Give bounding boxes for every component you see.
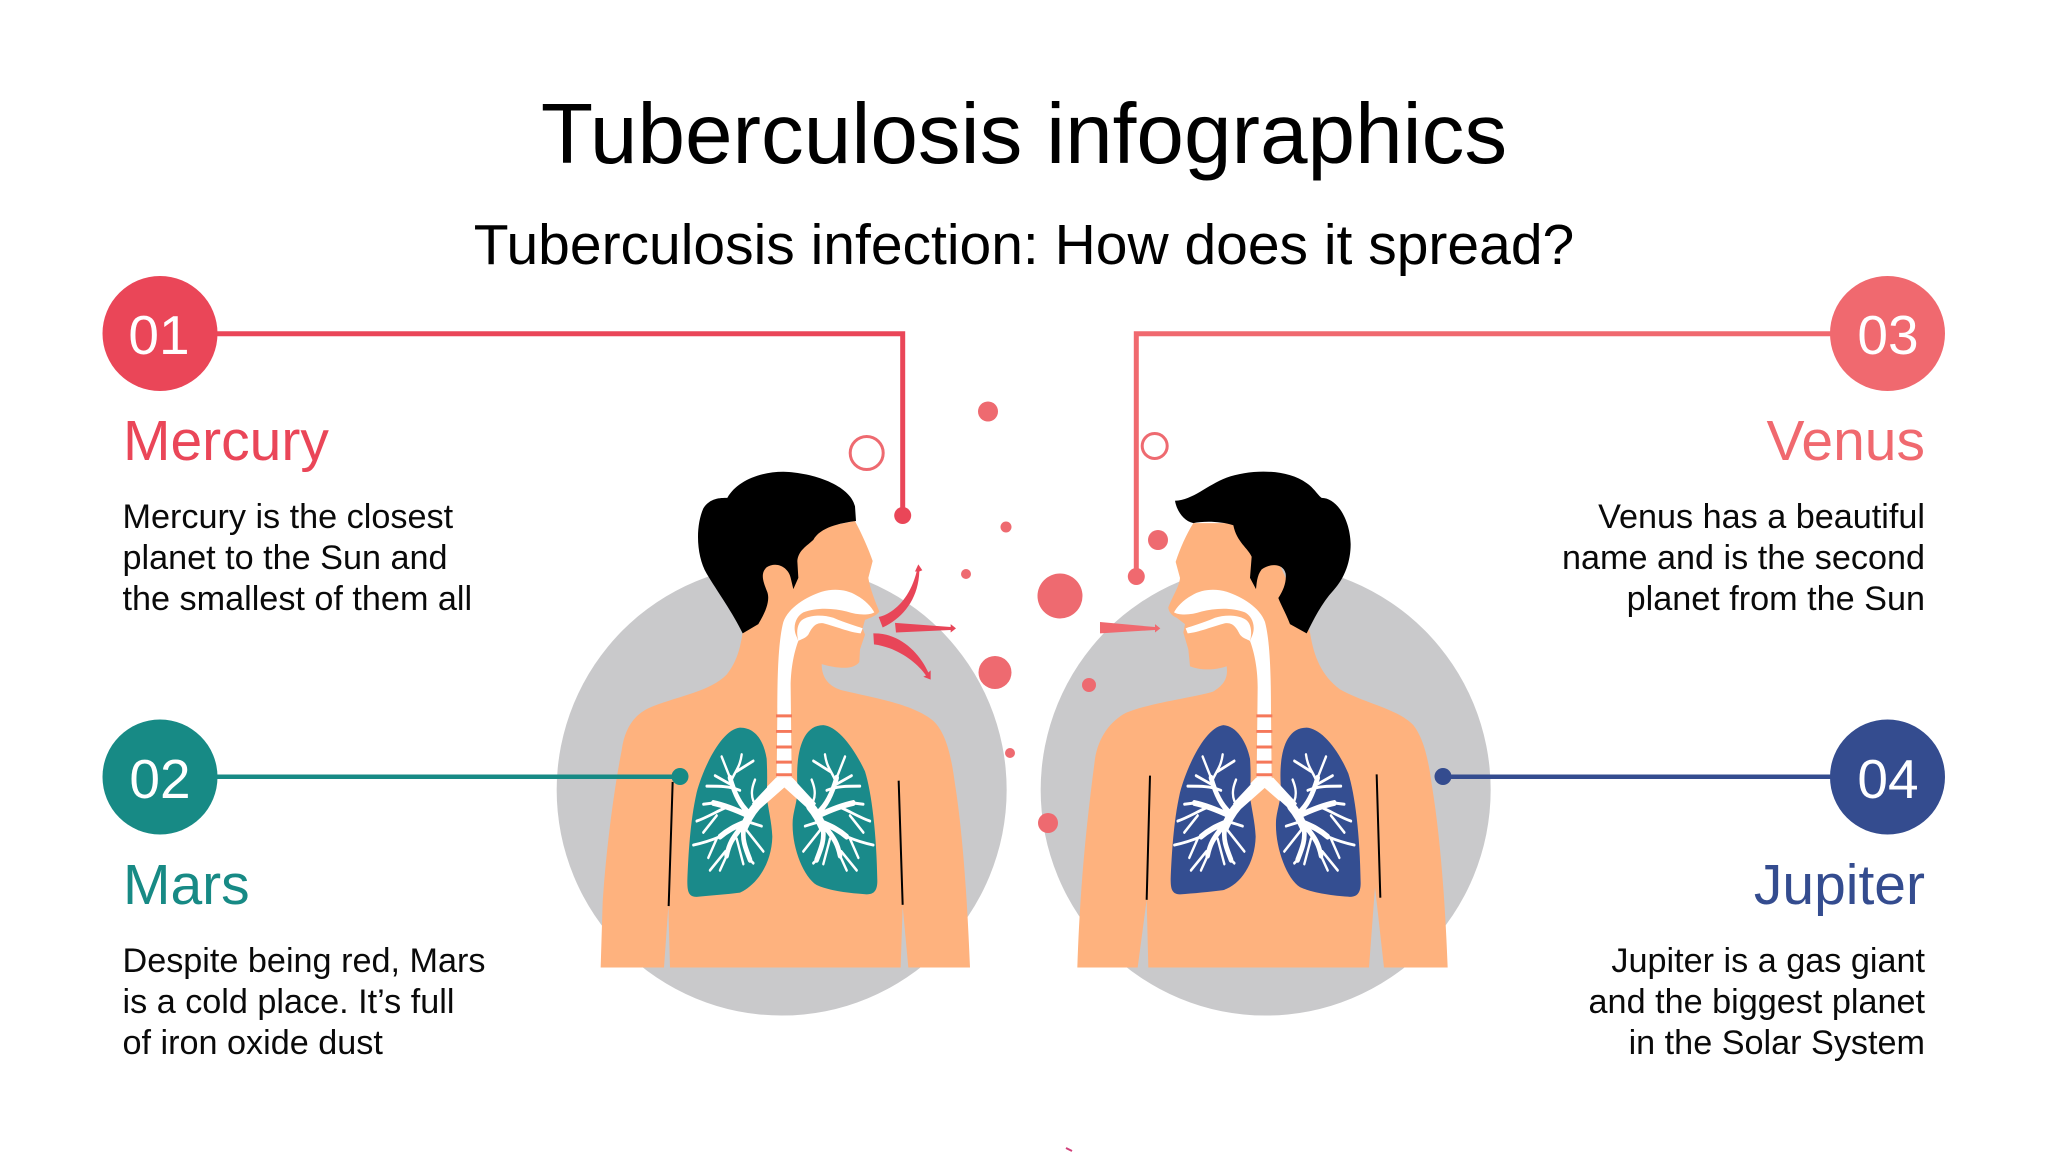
- number badge 03: [1830, 276, 1945, 391]
- connector 02: [210, 774, 680, 779]
- grey background circle: [557, 564, 1007, 1016]
- number 03: 03: [1857, 304, 1919, 366]
- number 02: 02: [129, 748, 191, 810]
- body Mars: Despite being red, Mars: [122, 942, 485, 980]
- hair: [698, 472, 856, 633]
- arrow: exhale up: [879, 564, 922, 627]
- panel: 03 Venus: [1128, 276, 1945, 618]
- bronchi: [752, 778, 816, 812]
- panel: 02 Mars: [102, 720, 688, 1062]
- body Venus: name and is the second: [1562, 539, 1925, 577]
- infectious droplets: [961, 402, 1168, 833]
- number badge 02: [102, 720, 218, 834]
- illustration: left person exhaling: [557, 472, 1007, 1016]
- panel: 01 Mercury: [102, 276, 911, 618]
- bronchial tree right: [1284, 755, 1354, 870]
- body Jupiter: and the biggest planet: [1589, 983, 1925, 1021]
- bronchial tree left: [693, 755, 763, 870]
- arrow: exhale down: [873, 633, 931, 680]
- body Mercury: planet to the Sun and: [122, 539, 448, 577]
- body Venus: Venus has a beautiful: [1598, 498, 1925, 536]
- body and face: [601, 521, 970, 968]
- airway and trachea: [1174, 590, 1300, 814]
- body Mars: of iron oxide dust: [122, 1024, 383, 1062]
- number badge 04: [1830, 720, 1945, 834]
- subtitle: Tuberculosis infection: How does it spread?: [474, 213, 1574, 277]
- panel: 04 Jupiter: [1434, 720, 1945, 1062]
- illustration: right person inhaling: [1041, 472, 1491, 1016]
- number badge 01: [102, 276, 218, 391]
- hair: [1175, 472, 1351, 633]
- arm lines: [669, 781, 903, 906]
- body Venus: planet from the Sun: [1627, 580, 1925, 618]
- connector dot 02: [672, 768, 688, 785]
- airway and trachea: [748, 590, 874, 814]
- body and face: [1077, 523, 1448, 968]
- number 01: 01: [128, 304, 190, 366]
- heading Mars: Mars: [123, 853, 250, 917]
- right lung: [793, 725, 877, 894]
- heading Venus: Venus: [1767, 409, 1925, 473]
- connector dot 04: [1434, 768, 1452, 785]
- body Mars: is a cold place. It’s full: [122, 983, 454, 1021]
- heading Jupiter: Jupiter: [1754, 853, 1925, 917]
- arrow: inhale: [1100, 622, 1160, 633]
- left lung: [687, 728, 772, 897]
- connector 01: [210, 334, 903, 515]
- arm lines: [1147, 774, 1380, 900]
- connector dot 01: [894, 507, 911, 524]
- body Jupiter: Jupiter is a gas giant: [1611, 942, 1925, 980]
- body Jupiter: in the Solar System: [1629, 1024, 1925, 1062]
- title: Tuberculosis infographics: [541, 87, 1507, 182]
- heading Mercury: Mercury: [123, 409, 329, 473]
- left lung: [1171, 725, 1256, 894]
- connector 03: [1136, 334, 1840, 576]
- small mark at bottom: [1066, 1148, 1072, 1151]
- grey background circle: [1041, 564, 1491, 1016]
- bronchial tree left: [1174, 755, 1244, 870]
- connector dot 03: [1128, 568, 1145, 585]
- connector 04: [1443, 774, 1840, 779]
- right lung: [1276, 728, 1361, 897]
- bronchial tree right: [803, 755, 873, 870]
- arrow: exhale straight: [895, 623, 956, 633]
- bronchi: [1233, 778, 1297, 812]
- body Mercury: Mercury is the closest: [122, 498, 454, 536]
- number 04: 04: [1857, 748, 1919, 810]
- body Mercury: the smallest of them all: [122, 580, 472, 618]
- hollow droplet rings: [850, 434, 1167, 470]
